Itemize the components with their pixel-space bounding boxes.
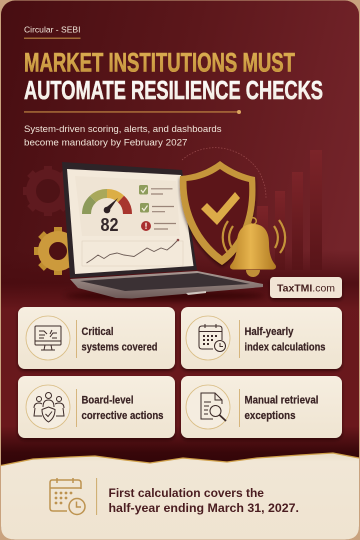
card text: exceptions <box>244 410 296 422</box>
card text <box>82 394 164 422</box>
title <box>24 48 323 105</box>
card text <box>244 394 318 422</box>
card text: corrective actions <box>82 410 164 422</box>
card text: Critical <box>82 326 114 338</box>
card text: Board-level <box>82 394 134 406</box>
score: 82 <box>100 215 118 235</box>
card text <box>82 326 158 354</box>
footer text: half-year ending March 31, 2027. <box>108 503 299 515</box>
laptop lid <box>62 162 197 278</box>
subtitle: become mandatory by February 2027 <box>24 136 188 148</box>
eyebrow: Circular - SEBI: Circular - SEBI <box>24 24 80 34</box>
bar chart backdrop <box>257 150 322 270</box>
card text: Manual retrieval <box>244 394 318 406</box>
subtitle: System-driven scoring, alerts, and dashboards <box>24 123 222 134</box>
line chart <box>82 239 183 266</box>
icon: bell <box>223 218 285 277</box>
subtitle <box>24 123 222 148</box>
card text: index calculations <box>244 342 326 354</box>
card text <box>244 326 326 354</box>
icon: document with magnifier <box>186 385 230 429</box>
icon: dark gear <box>23 166 73 216</box>
hero illustration <box>23 148 322 301</box>
badge: TaxTMI.com: TaxTMI.com <box>277 283 335 295</box>
card: Manual retrieval exceptions <box>181 376 342 438</box>
dotted arc <box>182 148 266 198</box>
card: Board-level corrective actions <box>18 376 175 438</box>
card text: Half-yearly <box>244 326 294 338</box>
footer text: First calculation covers the <box>108 488 264 500</box>
footer text <box>108 488 299 515</box>
icon: gold gear <box>34 227 82 275</box>
laptop base <box>70 271 263 298</box>
badge: TaxTMI.com <box>270 277 342 298</box>
laptop <box>62 162 263 298</box>
gauge needle <box>104 198 118 213</box>
card text: systems covered <box>82 342 158 354</box>
title rule with dot <box>24 110 241 114</box>
checklist <box>139 185 176 231</box>
icon: gold calendar clock <box>50 478 85 514</box>
icon: calendar clock <box>186 316 230 360</box>
gauge <box>86 193 128 214</box>
icon: monitor circuit <box>26 316 70 360</box>
laptop shadow <box>65 291 265 301</box>
laptop screen <box>67 169 194 274</box>
footer panel <box>1 453 359 540</box>
icon: board with shield <box>26 385 70 429</box>
card: Critical systems covered <box>18 307 175 369</box>
icon: shield <box>180 161 256 265</box>
card: Half-yearly index calculations <box>181 307 342 369</box>
